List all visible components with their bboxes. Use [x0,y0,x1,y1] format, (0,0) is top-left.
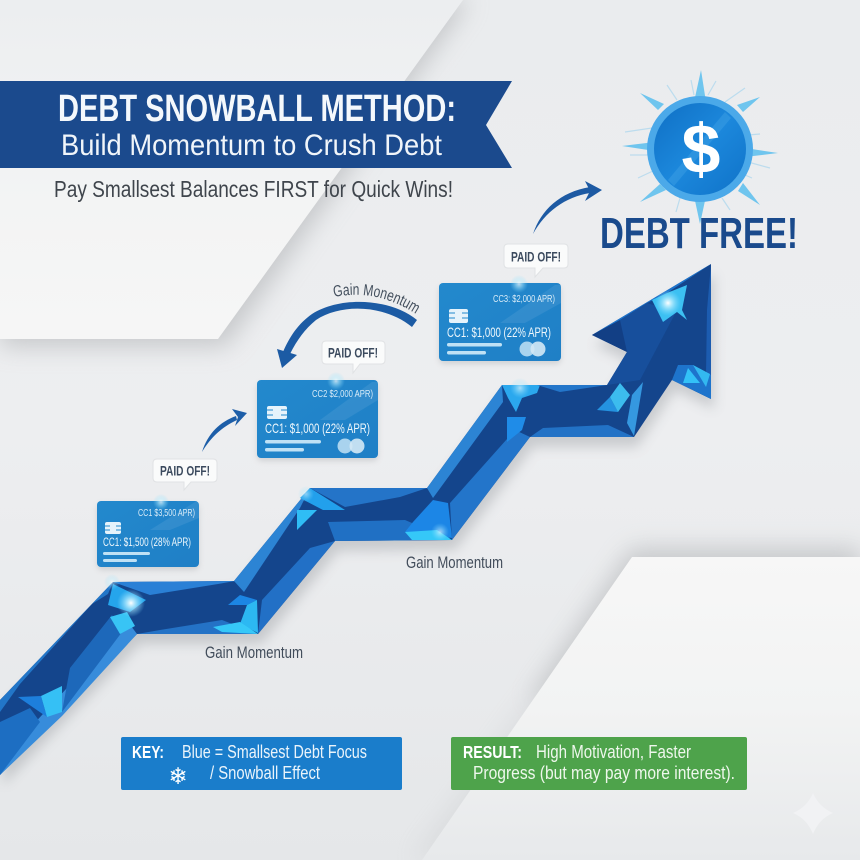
chart: rising faceted arrow [0,264,714,785]
callout: paid off 3: PAID OFF! [511,248,561,264]
key label: KEY: [132,742,164,762]
dollar sign: $ [682,110,720,188]
card bars [447,343,502,354]
arrow: gain momentum curve [277,302,417,368]
icon: snowflake: ❄ [168,764,188,790]
heading: debt free: DEBT FREE! [600,209,798,258]
panel: key [121,737,402,790]
card main text: CC1: $1,500 (28% APR) [103,535,191,549]
panel: result [451,737,747,790]
panel: credit card 2 [257,372,378,461]
result label: RESULT: [463,742,522,762]
card balance small: CC1 $3,500 APR) [138,508,195,519]
subtitle: Build Momentum to Crush Debt [61,129,443,162]
arrow: to debt free [533,181,602,234]
card bars [103,552,150,562]
card logo [338,438,364,454]
title: DEBT SNOWBALL METHOD: [58,88,456,130]
panel: credit card 3 [439,275,561,364]
label: gain momentum middle: Gain Momentum [406,554,503,572]
card bars [265,440,321,452]
card chip [105,522,121,534]
callout: paid off 2: PAID OFF! [328,344,378,360]
label: gain momentum lower: Gain Momentum [205,644,303,662]
card main text: CC1: $1,000 (22% APR) [447,324,551,340]
label: curved gain momentum: Gain Monentum [334,283,419,314]
result text line 2: Progress (but may pay more interest). [473,763,735,783]
card balance small: CC3: $2,000 APR) [493,293,555,305]
panel: credit card 1 [97,494,199,570]
card chip [449,309,468,323]
callout: paid off 1 [153,459,217,490]
key text line 1: Blue = Smallsest Debt Focus [182,742,367,762]
arrow: small step [202,409,247,452]
sparkle highlights [104,290,681,617]
result text line 1: High Motivation, Faster [536,742,691,762]
card main text: CC1: $1,000 (22% APR) [265,420,370,436]
sparkle watermark [793,793,833,834]
title banner [0,81,512,168]
callout: paid off 3 [504,244,568,277]
callout: paid off 1: PAID OFF! [160,462,210,478]
key text line 2: / Snowball Effect [210,763,320,783]
card chip [267,406,287,419]
card logo [520,342,546,356]
callout: paid off 2 [322,341,385,373]
card balance small: CC2 $2,000 APR) [312,388,373,400]
tagline: Pay Smallsest Balances FIRST for Quick Wins! [54,176,453,202]
icon: dollar coin [622,70,778,224]
